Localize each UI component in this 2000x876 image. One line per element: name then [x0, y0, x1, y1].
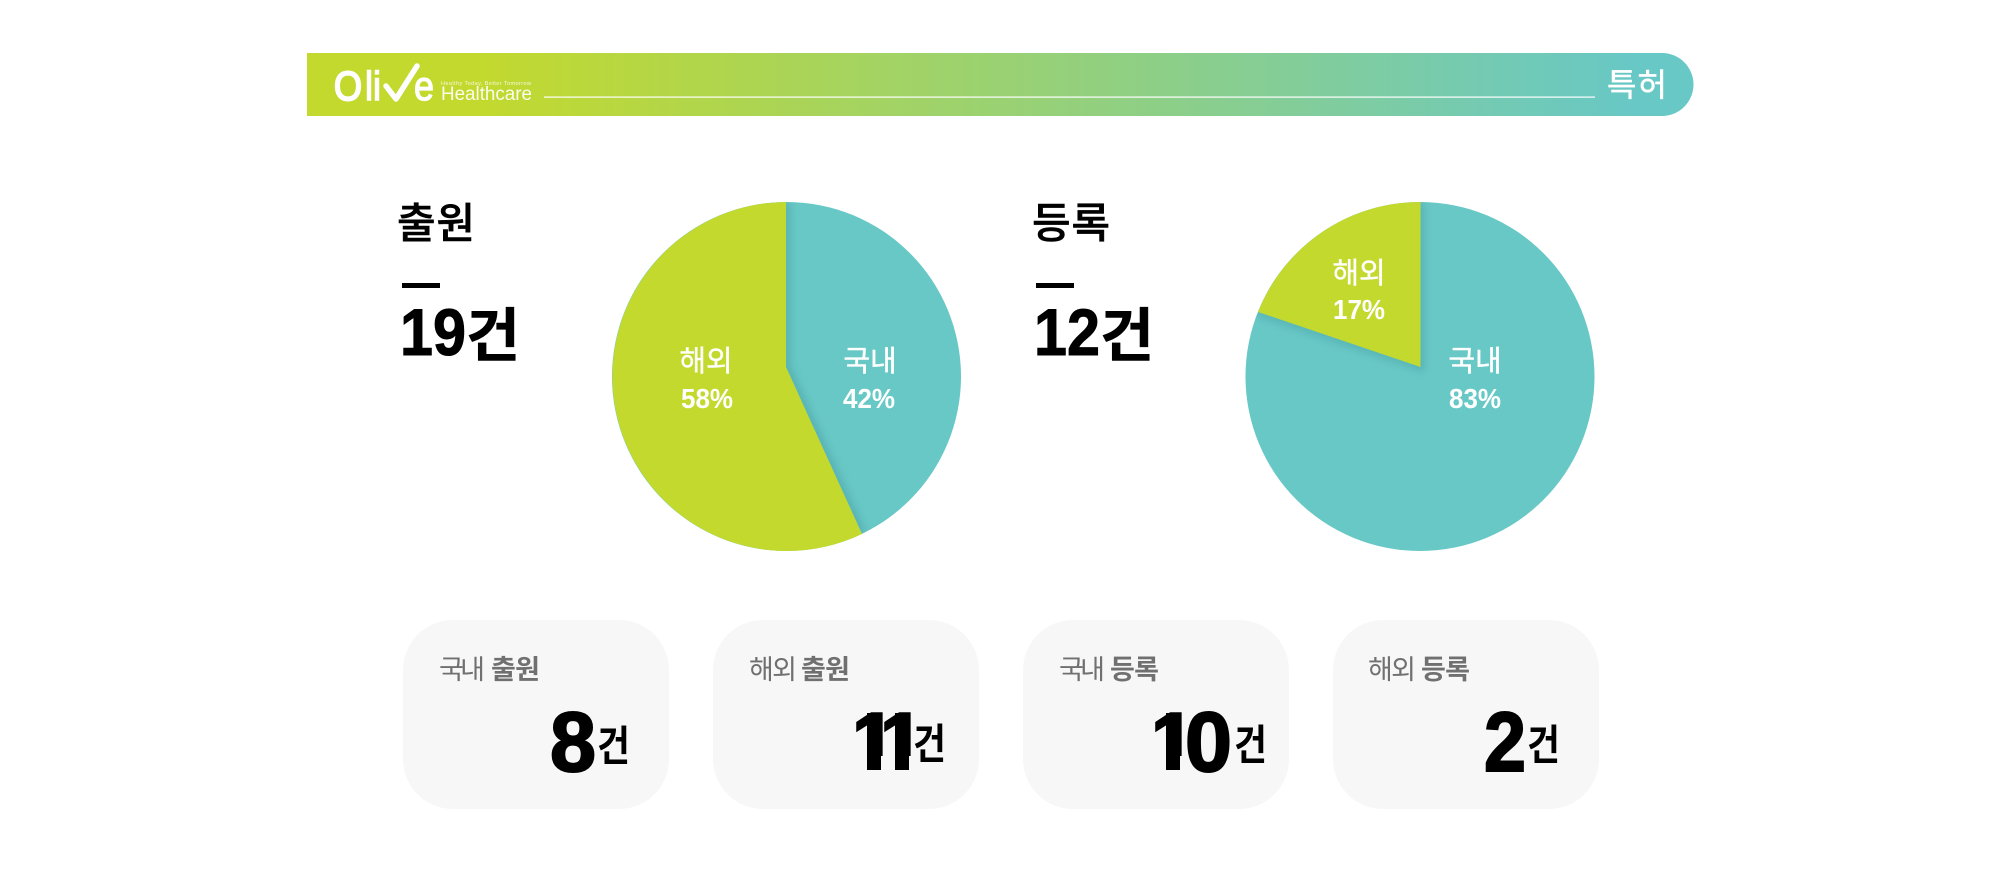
- pie chart: 등록: [1246, 202, 1594, 551]
- card: 국내 출원 8건: 국내: [439, 655, 485, 685]
- logo: Olive Healthcare: e: [414, 63, 434, 109]
- card: 국내 등록 10건: 등록: [1110, 655, 1159, 685]
- card: 해외 출원 11건: 해외: [749, 655, 797, 685]
- logo: Olive Healthcare: Healthy Today, Better Tomorrow: [441, 81, 531, 87]
- card: 해외 등록 2건: 건: [1527, 722, 1560, 769]
- card: 국내 등록 10건: 국내: [1059, 655, 1105, 685]
- panel: 등록 summary: 건: [1100, 304, 1154, 369]
- card: 국내 출원 8건: 출원: [491, 655, 540, 685]
- logo: Olive Healthcare: i: [373, 63, 381, 109]
- card: 해외 등록 2건: 등록: [1421, 655, 1470, 685]
- card: 해외 출원 11건: 건: [913, 721, 946, 768]
- card: 국내 등록 10건: 건: [1234, 722, 1267, 769]
- panel: 출원 summary: 출원: [397, 200, 475, 247]
- label: 국내 83%: [1448, 346, 1502, 414]
- panel: 등록 summary: 12: [1034, 295, 1100, 369]
- logo: Olive Healthcare: l: [365, 63, 373, 109]
- label: 국내 42%: 42%: [843, 383, 895, 414]
- label: 해외 17%: 해외: [1332, 258, 1386, 290]
- panel: 출원 summary: [397, 200, 520, 369]
- panel: 등록 summary: 등록: [1032, 200, 1110, 247]
- card: 해외 출원 11건: 1: [879, 695, 926, 789]
- logo: Olive Healthcare: Healthcare: [441, 84, 532, 105]
- card: 해외 등록 2건: [1333, 620, 1599, 809]
- panel: 등록 summary: [1032, 200, 1154, 369]
- label: 해외 17%: [1332, 258, 1386, 325]
- logo: Olive Healthcare: O: [334, 63, 362, 109]
- label: 국내 83%: 국내: [1448, 346, 1502, 378]
- card: 해외 등록 2건: 2: [1484, 695, 1526, 789]
- header bar: [307, 53, 1694, 116]
- card: 해외 출원 11건: 출원: [801, 655, 850, 685]
- card: 국내 출원 8건: 8: [550, 695, 596, 789]
- label: 해외 17%: 17%: [1333, 294, 1385, 325]
- card: 국내 등록 10건: 0: [1185, 695, 1232, 789]
- label: 국내 42%: [843, 346, 897, 414]
- card: 해외 출원 11건: 1: [851, 695, 898, 789]
- logo: Olive Healthcare: [334, 63, 532, 109]
- pie chart: 출원: [612, 202, 961, 551]
- label: 국내 42%: 국내: [843, 346, 897, 378]
- panel: 출원 summary: 건: [466, 304, 520, 369]
- label: 국내 83%: 83%: [1449, 383, 1501, 414]
- header title: 특허: [1607, 67, 1667, 103]
- panel: 출원 summary: 19: [400, 295, 466, 369]
- label: 해외 58%: [679, 346, 733, 414]
- card: 해외 출원 11건: [750, 656, 944, 770]
- card: 국내 등록 10건: 1: [1150, 695, 1197, 789]
- card: 국내 출원 8건: [403, 620, 669, 809]
- card: 국내 출원 8건: 건: [597, 723, 630, 770]
- card: 국내 등록 10건: [1060, 656, 1264, 773]
- label: 해외 58%: 58%: [681, 383, 733, 414]
- label: 해외 58%: 해외: [679, 346, 733, 378]
- card: 해외 등록 2건: 해외: [1368, 655, 1416, 685]
